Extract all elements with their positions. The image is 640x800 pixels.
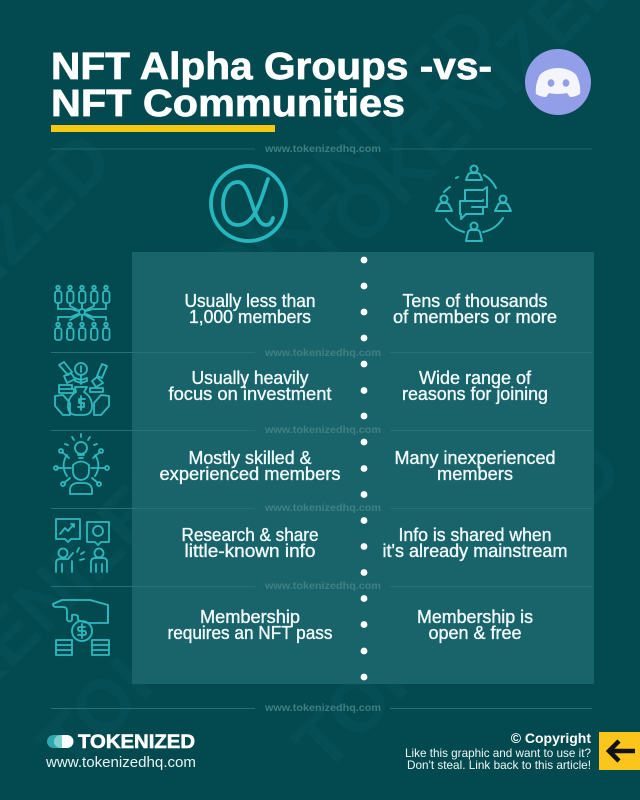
icon: discord logo	[525, 49, 591, 115]
panel: comparison table	[132, 252, 594, 684]
row 2 text: focus on investment	[168, 384, 332, 404]
row 3 text: Mostly skilled &	[188, 448, 312, 468]
centre dotted divider	[361, 257, 367, 680]
row dividers with watermark: www.tokenizedhq.com	[264, 581, 381, 592]
row 4 text: it's already mainstream	[382, 541, 568, 561]
icon: community circle	[436, 166, 511, 241]
title	[51, 46, 492, 125]
title: NFT Alpha Groups -vs-	[51, 46, 492, 88]
footer logo: TOKENIZED	[78, 732, 195, 753]
title underline	[51, 125, 275, 132]
row 2 text: reasons for joining	[402, 384, 548, 404]
icon: NFT pass payment	[53, 600, 109, 655]
row 1 text: of members or more	[393, 307, 557, 327]
row 4 text: Info is shared when	[398, 525, 552, 545]
background watermark: TOKENIZED	[153, 0, 513, 351]
row dividers with watermark: www.tokenizedhq.com	[264, 703, 381, 714]
icon: research and share	[56, 519, 109, 572]
row 2 text: Wide range of	[419, 368, 532, 388]
footer website: www.tokenizedhq.com	[45, 754, 196, 771]
logo mark	[47, 735, 74, 748]
row 3 text	[160, 448, 556, 484]
icon: skilled member with lightbulb	[54, 434, 109, 494]
row 1 text	[184, 291, 557, 327]
row 3 text: experienced members	[160, 464, 340, 484]
row dividers with watermark: www.tokenizedhq.com	[264, 425, 381, 436]
copyright notice	[405, 730, 591, 772]
row 5 text: Membership	[200, 607, 300, 627]
row 1 text: 1,000 members	[189, 307, 311, 327]
row 3 text: Many inexperienced	[394, 448, 556, 468]
copyright notice: Like this graphic and want to use it?	[405, 746, 591, 760]
icon: alpha symbol	[211, 166, 286, 241]
background watermark: TOKENIZED	[23, 426, 383, 786]
row dividers with watermark	[51, 348, 592, 714]
background watermark: TOKENIZED	[278, 426, 638, 786]
row 4 text: little-known info	[184, 541, 316, 561]
row 5 text: requires an NFT pass	[168, 623, 332, 643]
copyright notice: Don't steal. Link back to this article!	[407, 758, 591, 772]
row 5 text	[168, 607, 533, 643]
row 1 text: Tens of thousands	[402, 291, 548, 311]
row 2 text: Usually heavily	[192, 368, 308, 388]
icon: small group network	[55, 286, 110, 340]
row 4 text: Research & share	[182, 525, 318, 545]
row dividers with watermark: www.tokenizedhq.com	[264, 503, 381, 514]
row 3 text: members	[437, 464, 513, 484]
icon: investment money bag	[55, 362, 109, 415]
row 1 text: Usually less than	[184, 291, 316, 311]
row 2 text	[168, 368, 548, 404]
title: NFT Communities	[51, 83, 405, 125]
top watermark divider: www.tokenizedhq.com	[264, 144, 381, 155]
row 5 text: open & free	[428, 623, 522, 643]
icon: yellow arrow box	[599, 732, 640, 770]
copyright notice: © Copyright	[511, 730, 591, 746]
row 4 text	[182, 525, 568, 561]
row 5 text: Membership is	[417, 607, 533, 627]
row dividers with watermark: www.tokenizedhq.com	[264, 348, 381, 359]
